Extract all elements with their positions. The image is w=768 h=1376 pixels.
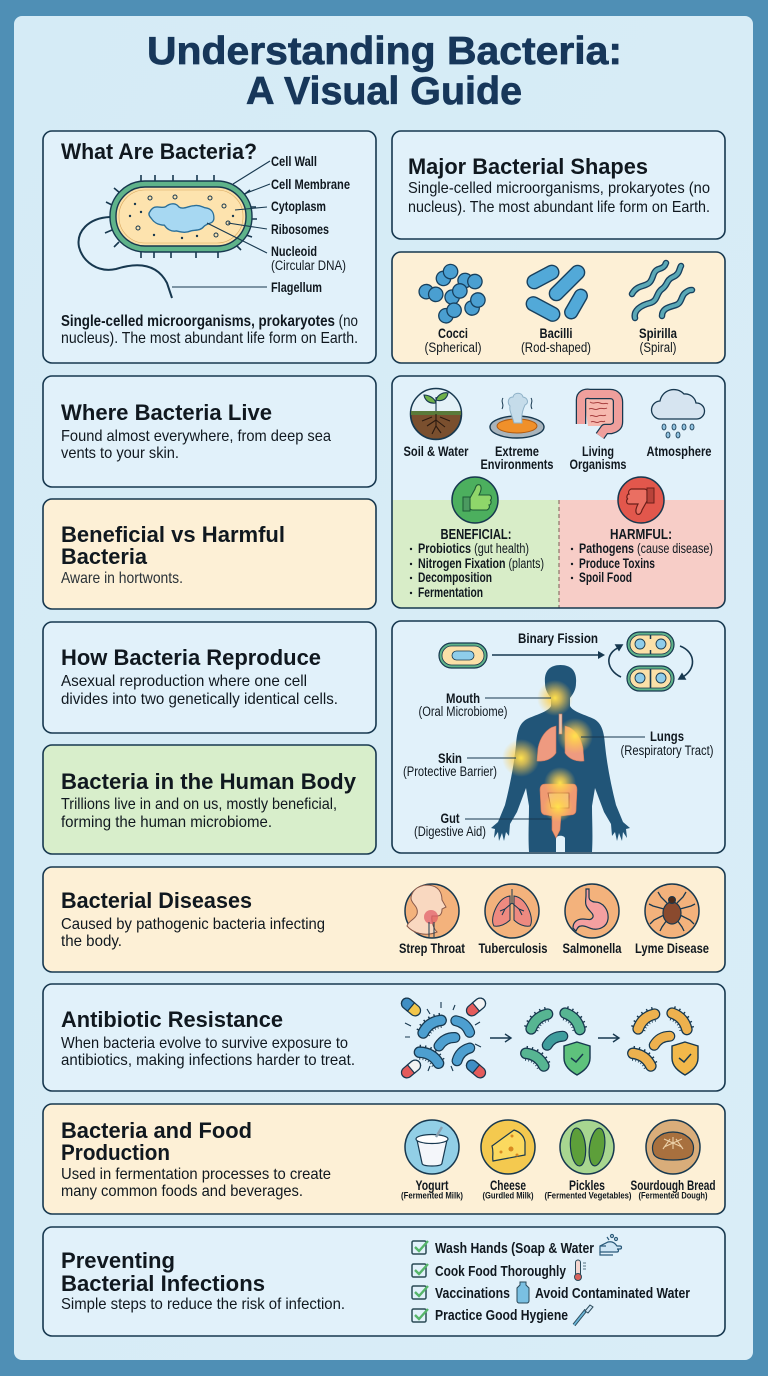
labels: shapes: (Spiral)	[640, 340, 676, 355]
labels: cell parts: (Circular DNA)	[271, 258, 346, 273]
panel: beneficial vs harmful text: Beneficial vs Harmful	[61, 522, 285, 547]
panel: how bacteria reproduce text: How Bacteria Reproduce	[61, 645, 321, 670]
illustration: antibiotics attack bacteria	[399, 996, 488, 1080]
panel: where bacteria live text	[43, 376, 376, 487]
labels: diseases: Salmonella	[562, 941, 622, 956]
labels: cell parts: Cytoplasm	[271, 199, 326, 214]
labels: habitats: Organisms	[570, 457, 626, 472]
panel: bacterial diseases: Bacterial Diseases	[61, 888, 252, 913]
labels: cell parts: Cell Wall	[271, 154, 317, 169]
labels: foods: (Fermented Vegetables)	[544, 1190, 632, 1200]
labels: shapes: Spirilla	[639, 326, 677, 341]
harmful background	[559, 500, 725, 608]
checklist: Vaccinations	[435, 1286, 510, 1302]
panel: antibiotic resistance: When bacteria evolve to survive exposure to	[61, 1035, 348, 1052]
panel: preventing bacterial infections: Bacterial Infections	[61, 1271, 265, 1296]
panel: beneficial vs harmful text: Bacteria	[61, 544, 148, 569]
checklist: Wash Hands (Soap & Water	[435, 1241, 594, 1257]
panel: where bacteria live text: vents to your skin.	[61, 445, 179, 462]
panel: major bacterial shapes: nucleus). The most abundant life form on Earth.	[408, 199, 710, 216]
labels: habitats: Soil & Water	[404, 444, 469, 459]
diagram: bacterial cell	[79, 175, 257, 298]
list: harmful	[571, 527, 713, 585]
panel: bacterial diseases	[43, 867, 725, 972]
labels: foods: Yogurt	[416, 1178, 449, 1193]
labels: microbiome sites: (Respiratory Tract)	[620, 743, 714, 758]
panel: bacteria and food production: Production	[61, 1140, 170, 1165]
panel: bacteria and food production: Bacteria and Food	[61, 1118, 252, 1143]
panel: bacteria in human body text: Trillions live in and on us, mostly beneficial,	[61, 796, 337, 813]
list: harmful: Spoil Food	[579, 570, 632, 585]
organ: lungs	[537, 714, 584, 761]
checklist: Cook Food Thoroughly	[435, 1264, 566, 1280]
panel: beneficial vs harmful text: Aware in hortwonts.	[61, 570, 183, 587]
labels: diseases: Tuberculosis	[478, 941, 548, 956]
labels: foods: Pickles	[569, 1178, 605, 1193]
icon: single cell	[439, 643, 487, 668]
panel: bacteria and food production: Used in fermentation processes to create	[61, 1166, 331, 1183]
labels: shapes	[424, 326, 677, 355]
icon: thumbs down	[618, 477, 664, 523]
labels: shapes: (Spherical)	[424, 340, 482, 355]
labels: microbiome sites: (Digestive Aid)	[414, 824, 486, 839]
labels: diseases: Strep Throat	[399, 941, 465, 956]
organ: intestine	[540, 784, 577, 838]
labels: shapes: Bacilli	[540, 326, 572, 341]
title	[147, 30, 622, 113]
labels: cell parts: Ribosomes	[271, 222, 329, 237]
panel: bacteria in human body text	[43, 745, 376, 854]
labels: microbiome sites: Skin	[438, 751, 462, 766]
labels: foods: Cheese	[490, 1178, 526, 1193]
list: beneficial: Nitrogen Fixation (plants)	[418, 556, 544, 571]
panel: major bacterial shapes	[392, 131, 725, 239]
panel: bacteria in human body text: forming the human microbiome.	[61, 814, 272, 831]
list: beneficial: BENEFICIAL:	[440, 527, 512, 543]
list: harmful: HARMFUL:	[610, 527, 672, 543]
panel: bacteria and food production	[43, 1104, 725, 1214]
labels: microbiome sites: Lungs	[650, 729, 684, 744]
panel: preventing bacterial infections	[43, 1227, 725, 1336]
checklist: Practice Good Hygiene	[435, 1308, 568, 1324]
list: beneficial	[410, 527, 544, 600]
panel: binary fission and human body	[392, 621, 725, 853]
panel: preventing bacterial infections: Preventing	[61, 1248, 175, 1273]
panel: beneficial vs harmful text	[43, 499, 376, 609]
panel: how bacteria reproduce text: divides into two genetically identical cells.	[61, 691, 338, 708]
labels: foods: Sourdough Bread	[630, 1178, 716, 1193]
illustration: surviving green bacteria	[526, 1011, 590, 1075]
labels: microbiome sites: (Oral Microbiome)	[418, 704, 508, 719]
labels: habitats: Extreme	[495, 444, 539, 459]
title: Understanding Bacteria:	[147, 30, 622, 73]
labels: foods: (Fermented Dough)	[638, 1190, 708, 1200]
labels: cell parts	[271, 154, 350, 295]
panel: bacterial diseases: the body.	[61, 933, 122, 950]
arrow: division	[492, 651, 605, 659]
labels: microbiome sites: Gut	[440, 811, 460, 826]
icon: dividing cells	[627, 632, 674, 691]
labels: microbiome sites: (Protective Barrier)	[403, 764, 497, 779]
panel: antibiotic resistance: Antibiotic Resistance	[61, 1007, 283, 1032]
list: beneficial: Fermentation	[418, 585, 483, 600]
description: Single-celled microorganisms, prokaryotes (no	[61, 313, 358, 330]
labels: cell parts: Cell Membrane	[271, 177, 350, 192]
labels: habitats: Environments	[480, 457, 554, 472]
labels: microbiome sites	[403, 691, 714, 839]
labels: habitats: Living	[582, 444, 614, 459]
icon: bacilli	[524, 262, 590, 324]
panel: bacterial diseases: Caused by pathogenic bacteria infecting	[61, 916, 325, 933]
list: beneficial: Probiotics (gut health)	[418, 541, 529, 556]
icon: washing hands	[600, 1234, 622, 1255]
labels: microbiome sites: Mouth	[446, 691, 480, 706]
icon: pickles	[560, 1120, 614, 1174]
arrows: cycle	[609, 645, 693, 679]
list: beneficial: Decomposition	[418, 570, 492, 585]
icon: water bottle	[517, 1282, 529, 1303]
panel: shape illustrations	[392, 252, 725, 363]
icon: strep throat	[405, 884, 459, 938]
panel: what are bacteria	[43, 131, 376, 363]
labels: foods: (Fermented Milk)	[401, 1190, 463, 1200]
arrow	[598, 1034, 619, 1042]
description	[61, 313, 358, 347]
title: A Visual Guide	[246, 70, 522, 113]
labels: shapes: Cocci	[438, 326, 468, 341]
labels: diseases: Lyme Disease	[635, 941, 709, 956]
icon: yogurt	[405, 1120, 459, 1174]
label: binary fission: Binary Fission	[518, 630, 598, 646]
labels: habitats	[404, 444, 712, 472]
icon: toothbrush	[574, 1305, 593, 1325]
labels: shapes: (Rod-shaped)	[521, 340, 591, 355]
labels: habitats: Atmosphere	[646, 444, 712, 459]
panel: bacteria and food production: many common foods and beverages.	[61, 1183, 303, 1200]
checklist	[412, 1234, 690, 1325]
icon: tuberculosis	[485, 884, 539, 938]
labels: foods	[401, 1178, 716, 1200]
description: nucleus). The most abundant life form on Earth.	[61, 330, 358, 347]
icon: spirilla	[632, 263, 692, 318]
icon: lyme disease tick	[645, 884, 699, 938]
labels: foods: (Gurdled Milk)	[482, 1190, 534, 1200]
panel: bacteria in human body text: Bacteria in the Human Body	[61, 769, 357, 794]
labels: cell parts: Nucleoid	[271, 244, 317, 259]
icon: cocci	[416, 262, 490, 324]
heading: what are bacteria: What Are Bacteria?	[61, 139, 257, 164]
list: harmful: Pathogens (cause disease)	[579, 541, 713, 556]
arrow	[490, 1034, 511, 1042]
labels: diseases	[399, 941, 709, 956]
panel: how bacteria reproduce text	[43, 622, 376, 733]
checklist: Avoid Contaminated Water	[535, 1286, 690, 1302]
panel: preventing bacterial infections: Simple steps to reduce the risk of infection.	[61, 1296, 345, 1313]
panel: where bacteria live text: Found almost everywhere, from deep sea	[61, 428, 331, 445]
icon: cheese	[481, 1120, 535, 1174]
panel: major bacterial shapes: Single-celled microorganisms, prokaryotes (no	[408, 180, 710, 197]
icon: thumbs up	[452, 477, 498, 523]
panel: antibiotic resistance	[43, 984, 725, 1091]
panel: habitats and beneficial/harmful	[392, 376, 725, 608]
icon: living organisms	[581, 394, 618, 436]
icon: salmonella	[565, 884, 619, 938]
list: harmful: Produce Toxins	[579, 556, 655, 571]
icon: atmosphere cloud	[652, 390, 705, 438]
icon: thermometer	[574, 1260, 586, 1280]
labels: cell parts: Flagellum	[271, 280, 322, 295]
illustration: human body	[491, 665, 630, 852]
illustration: resistant orange bacteria	[633, 1011, 698, 1075]
icon: sourdough bread	[646, 1120, 700, 1174]
beneficial background	[392, 500, 559, 608]
panel: major bacterial shapes: Major Bacterial Shapes	[408, 154, 648, 179]
panel: antibiotic resistance: antibiotics, making infections harder to treat.	[61, 1052, 355, 1069]
icon: soil and water	[410, 388, 462, 440]
panel: where bacteria live text: Where Bacteria Live	[61, 400, 272, 425]
panel: how bacteria reproduce text: Asexual reproduction where one cell	[61, 673, 307, 690]
icon: extreme environment	[490, 393, 544, 438]
